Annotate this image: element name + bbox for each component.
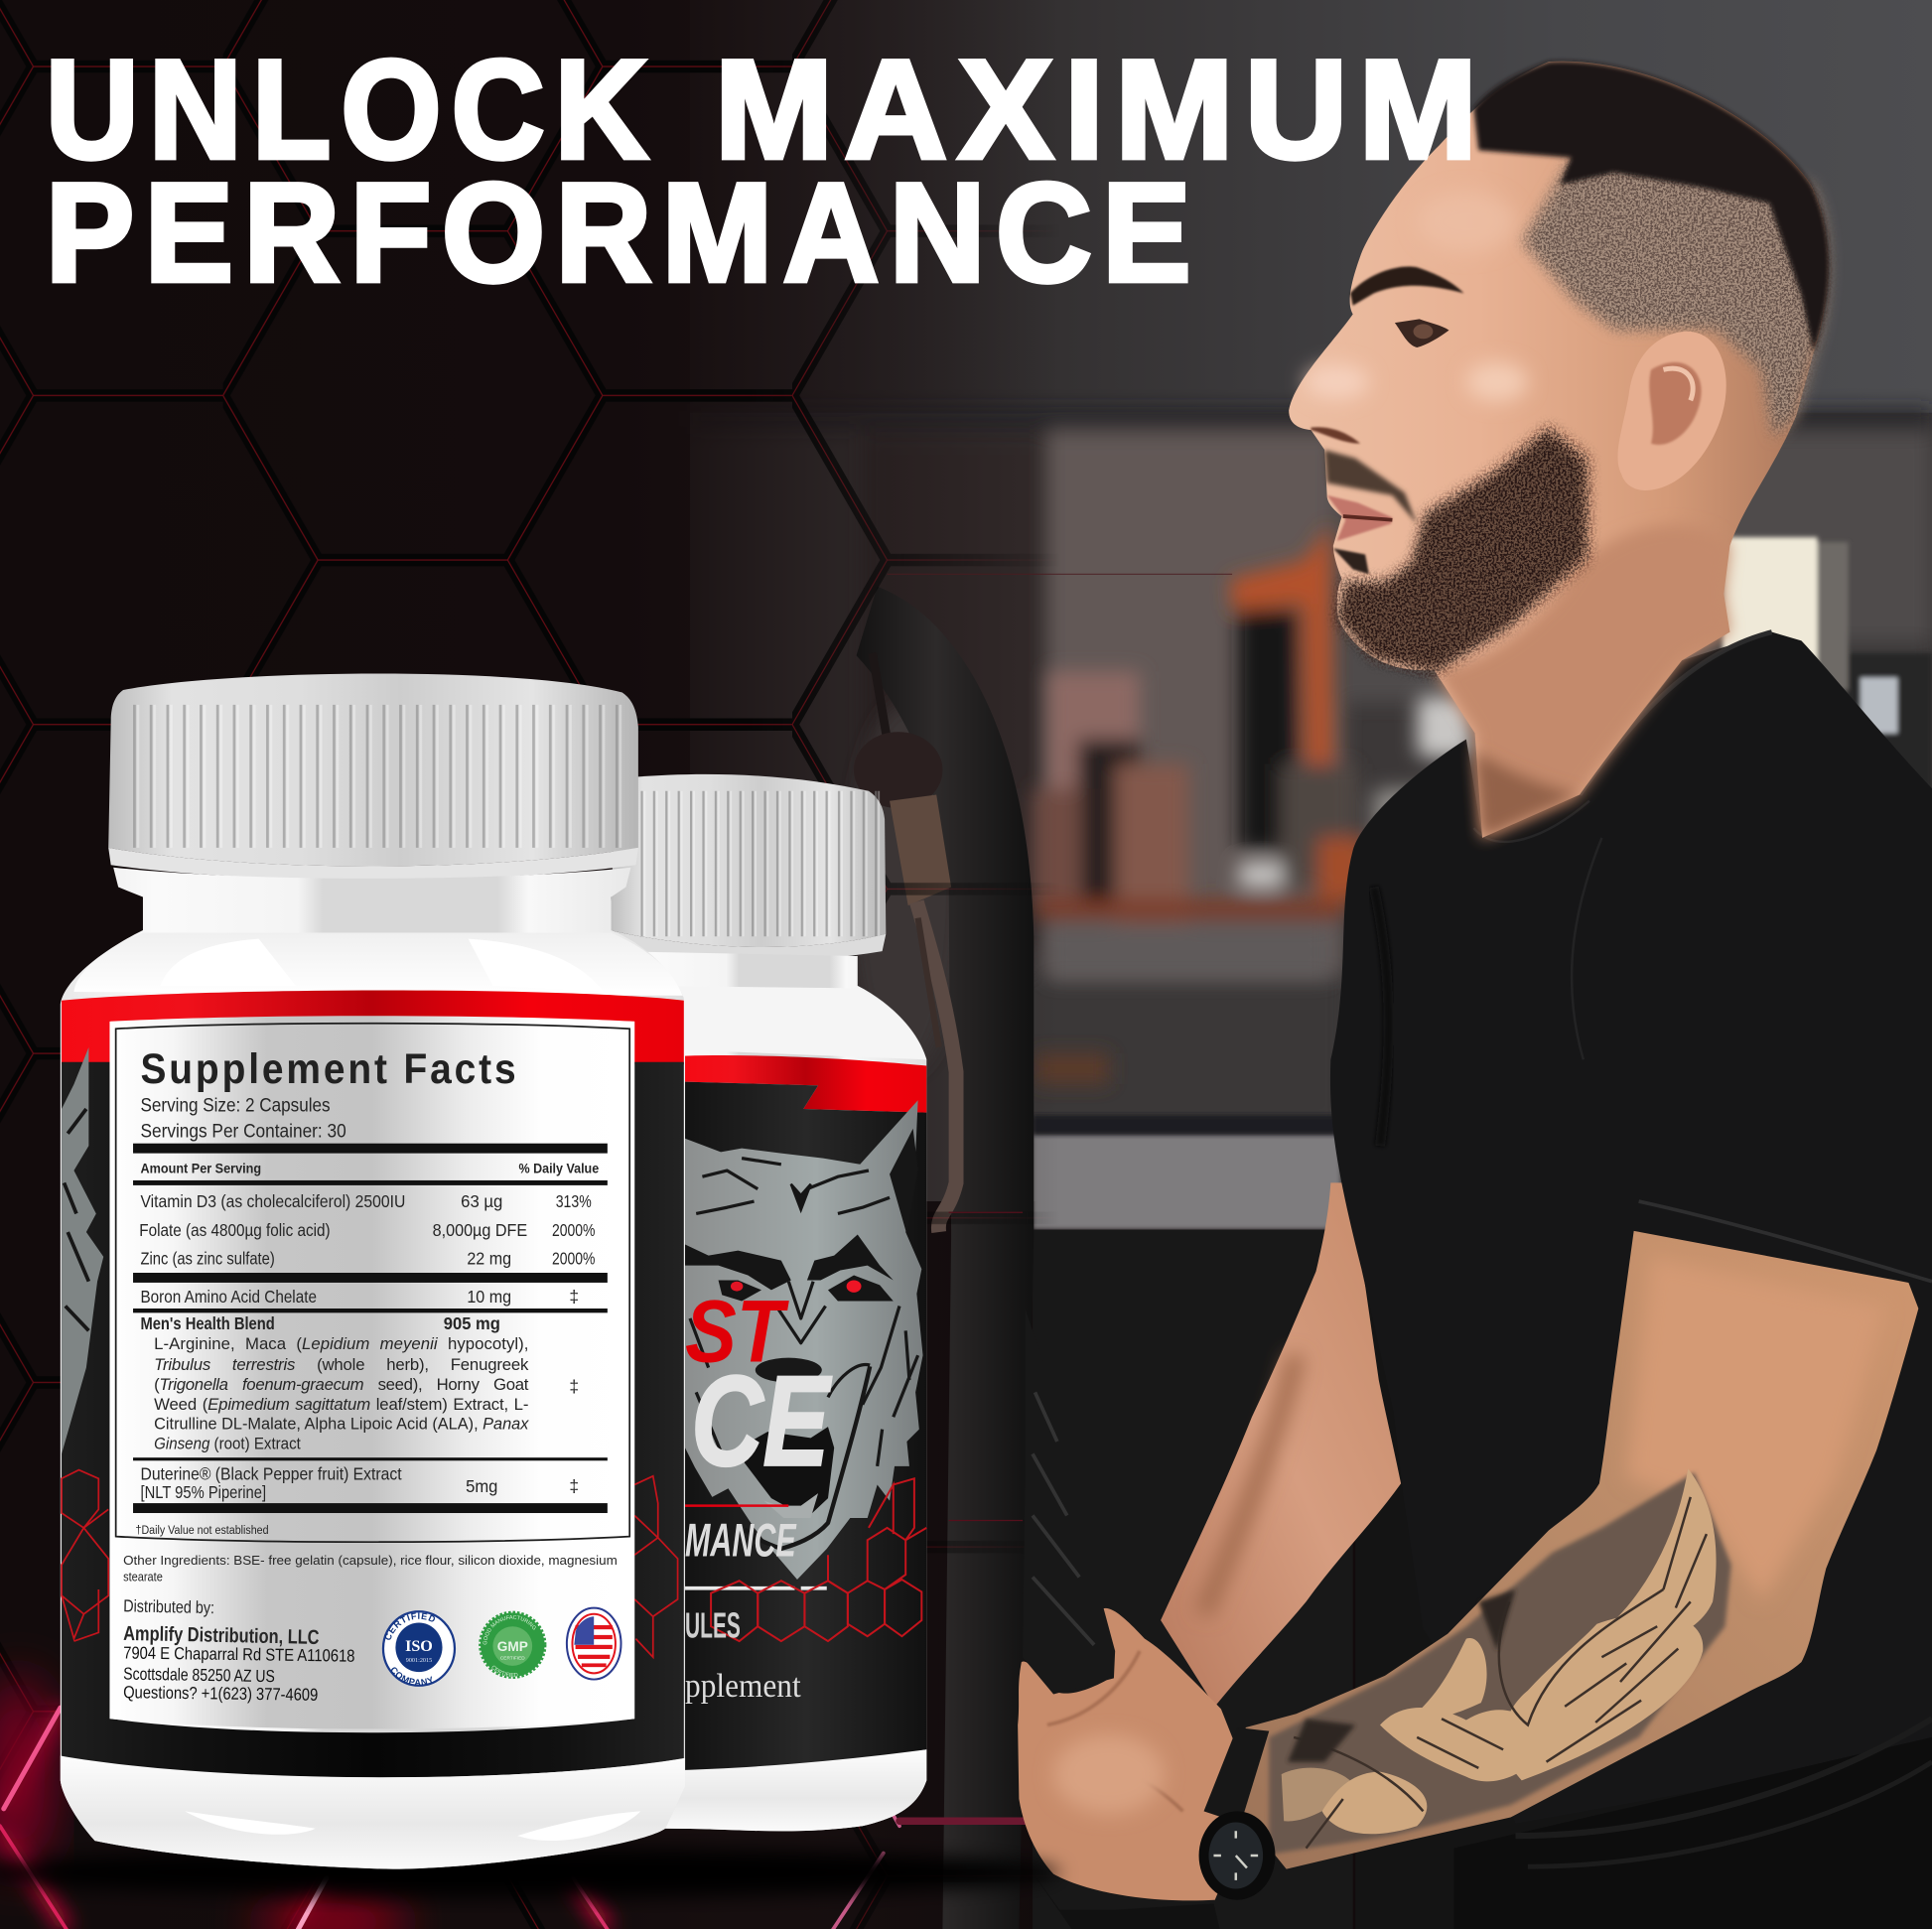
ear bbox=[1618, 332, 1726, 490]
title: PERFORMANCE bbox=[46, 154, 1201, 311]
table header bbox=[140, 1161, 599, 1176]
men's health blend bbox=[140, 1313, 579, 1452]
icon: ISO badge: 9001:2015 bbox=[406, 1657, 432, 1664]
gym equipment, blurred bbox=[1033, 523, 1472, 1084]
black label bbox=[685, 1082, 926, 1770]
wolf head bbox=[685, 1100, 923, 1580]
men's health blend: Citrulline DL-Malate, Alpha Lipoic Acid (ALA), Panax bbox=[154, 1415, 529, 1434]
right bottle: CE bbox=[691, 1350, 832, 1493]
cheek highlights bbox=[1305, 191, 1528, 402]
distributor block: Distributed by: bbox=[123, 1595, 214, 1617]
distributor block bbox=[123, 1595, 355, 1705]
nutrient rows: 22 mg bbox=[467, 1248, 511, 1268]
icon: GMP badge: CERTIFIED bbox=[492, 1666, 518, 1678]
men's health blend: Ginseng (root) Extract bbox=[154, 1434, 301, 1452]
tattoo bbox=[1269, 1468, 1731, 1855]
nutrient rows: Zinc (as zinc sulfate) bbox=[140, 1248, 275, 1268]
eyebrow bbox=[1350, 267, 1463, 306]
waistband and pants bbox=[1453, 1737, 1932, 1929]
right bottle bbox=[604, 774, 926, 1831]
wolf nose bbox=[756, 1358, 822, 1382]
eye bbox=[1395, 319, 1449, 347]
lips bbox=[1327, 495, 1392, 541]
men's health blend: 905 mg bbox=[444, 1313, 500, 1333]
man bbox=[1018, 62, 1932, 1929]
icon: GMP badge: GOOD MANUFACTURING bbox=[483, 1615, 536, 1644]
far arm shading bbox=[1204, 1355, 1297, 1614]
mustache bbox=[1324, 450, 1417, 523]
hand bbox=[1018, 1608, 1247, 1900]
neck shadow bbox=[1435, 525, 1729, 838]
neon hexagon glow at bottom bbox=[0, 574, 1232, 1929]
nutrient rows: ‡ bbox=[569, 1287, 579, 1307]
wolf ear shade bbox=[890, 1129, 918, 1235]
wolf brows bbox=[685, 1184, 894, 1302]
serving text: Serving Size: 2 Capsules bbox=[140, 1095, 331, 1116]
men's health blend: L-Arginine, Maca (Lepidium meyenii hypocotyl), bbox=[154, 1334, 528, 1353]
duterine row: Duterine® (Black Pepper fruit) Extract bbox=[140, 1464, 402, 1484]
icon: GMP badge: GMP bbox=[497, 1639, 528, 1654]
dark hair top bbox=[1473, 62, 1829, 352]
beard base bbox=[1338, 431, 1585, 670]
nutrient rows: 2000% bbox=[552, 1248, 595, 1268]
nutrient rows bbox=[139, 1191, 595, 1307]
nutrient rows: 8,000µg DFE bbox=[433, 1220, 527, 1240]
duterine row bbox=[140, 1464, 579, 1502]
distributor block: Scottsdale 85250 AZ US bbox=[123, 1664, 275, 1686]
red band bbox=[62, 990, 684, 1064]
cap bbox=[108, 674, 638, 866]
duterine row: 5mg bbox=[466, 1476, 497, 1496]
footnote: †Daily Value not established bbox=[136, 1523, 269, 1537]
wolf mouth bbox=[745, 1427, 834, 1518]
shirt folds and seams bbox=[1374, 632, 1932, 1282]
head and neck bbox=[1289, 62, 1828, 838]
beard stubble bbox=[1335, 425, 1589, 675]
table header: % Daily Value bbox=[518, 1161, 599, 1176]
men's health blend: Tribulus terrestris (whole herb), Fenugreek bbox=[154, 1355, 529, 1374]
serving text: Servings Per Container: 30 bbox=[140, 1121, 346, 1142]
icon: ISO badge: COMPANY bbox=[391, 1667, 432, 1686]
men's health blend: ‡ bbox=[569, 1376, 579, 1396]
label hexagons, left strip bbox=[62, 1470, 108, 1641]
rope lower grip bbox=[1033, 1872, 1220, 1929]
men's health blend: Weed (Epimedium sagittatum leaf/stem) Extract, L- bbox=[154, 1395, 528, 1414]
faded hair bbox=[1523, 148, 1828, 438]
distributor block: Amplify Distribution, LLC bbox=[123, 1622, 320, 1649]
hexagon grid pattern bbox=[0, 0, 1059, 1929]
nutrient rows: Folate (as 4800µg folic acid) bbox=[139, 1220, 331, 1240]
base of right bottle bbox=[665, 1749, 926, 1831]
nutrient rows: 10 mg bbox=[467, 1287, 511, 1307]
lighter space inside the pole arc bbox=[850, 702, 961, 1072]
nostril bbox=[1311, 427, 1360, 444]
wolf fur remnant bbox=[62, 1047, 103, 1453]
title bbox=[46, 31, 1488, 311]
nutrient rows: Vitamin D3 (as cholecalciferol) 2500IU bbox=[140, 1191, 405, 1211]
white supplement panel bbox=[109, 1016, 634, 1729]
icon: ISO badge: ISO bbox=[405, 1638, 433, 1655]
duterine row: ‡ bbox=[569, 1476, 579, 1496]
cap bbox=[610, 774, 886, 947]
duterine row: [NLT 95% Piperine] bbox=[140, 1482, 266, 1502]
red band bbox=[685, 1055, 926, 1113]
men's health blend: Men's Health Blend bbox=[140, 1313, 275, 1333]
pole and rope anchor bbox=[854, 587, 1034, 1929]
neck shadow near collar bbox=[1475, 752, 1580, 838]
table rules bbox=[133, 1144, 608, 1513]
near arm with sleeve edge bbox=[1240, 1231, 1918, 1869]
icon: GMP badge: CERTIFIED bbox=[500, 1656, 525, 1661]
icon: USA flag badge bbox=[567, 1608, 621, 1680]
right bottle: pplement bbox=[685, 1668, 801, 1705]
upper arm glow bbox=[1626, 1257, 1885, 1601]
rope bbox=[1023, 1309, 1115, 1694]
chin patch bbox=[1333, 548, 1369, 574]
label hexagons, right strip bbox=[634, 1476, 678, 1657]
title: UNLOCK bbox=[46, 31, 658, 188]
label hexagons on right bottle bbox=[711, 1478, 926, 1641]
wolf fur strokes bbox=[690, 1159, 918, 1549]
base of left bottle bbox=[61, 1756, 685, 1869]
window highlights behind the man bbox=[1723, 537, 1932, 801]
watch bbox=[1199, 1727, 1276, 1900]
nutrient rows: 2000% bbox=[552, 1220, 595, 1240]
right bottle: MANCE bbox=[685, 1513, 797, 1566]
stubble on faded hair bbox=[1523, 148, 1828, 438]
icon: GMP badge bbox=[479, 1610, 546, 1679]
nutrient rows: Boron Amino Acid Chelate bbox=[140, 1287, 317, 1307]
brand letters on right bottle: ST bbox=[685, 1281, 789, 1380]
wolf eyes bbox=[847, 1280, 862, 1293]
table header: Amount Per Serving bbox=[140, 1161, 261, 1176]
icon: ISO badge: CERTIFIED bbox=[385, 1612, 435, 1640]
nutrient rows: 313% bbox=[556, 1191, 592, 1211]
black label bbox=[62, 1062, 684, 1777]
shadow under bottles bbox=[0, 1849, 1059, 1897]
background fade over left side bbox=[0, 0, 1059, 1929]
distributor block: 7904 E Chaparral Rd STE A110618 bbox=[123, 1642, 355, 1666]
men's health blend: (Trigonella foenum-graecum seed), Horny Goat bbox=[154, 1375, 529, 1394]
heading: Supplement Facts: Supplement Facts bbox=[140, 1045, 518, 1092]
icon: ISO badge bbox=[381, 1610, 457, 1687]
distributor block: Questions? +1(623) 377-4609 bbox=[123, 1682, 318, 1705]
far forearm bbox=[1161, 1182, 1401, 1707]
neck and shoulder bbox=[604, 951, 926, 1831]
panel inner border bbox=[116, 1024, 629, 1542]
title: MAXIMUM bbox=[715, 31, 1488, 188]
other ingredients: Other Ingredients: BSE- free gelatin (capsule), rice flour, silicon dioxide, magnesium bbox=[123, 1553, 618, 1568]
other ingredients bbox=[123, 1553, 618, 1584]
left bottle bbox=[60, 673, 685, 1869]
serving text bbox=[140, 1095, 346, 1142]
neck and body bbox=[61, 868, 685, 1869]
nutrient rows: 63 µg bbox=[461, 1191, 502, 1211]
other ingredients: stearate bbox=[123, 1569, 163, 1584]
right bottle: ULES bbox=[685, 1604, 741, 1645]
shirt bbox=[1330, 632, 1932, 1824]
